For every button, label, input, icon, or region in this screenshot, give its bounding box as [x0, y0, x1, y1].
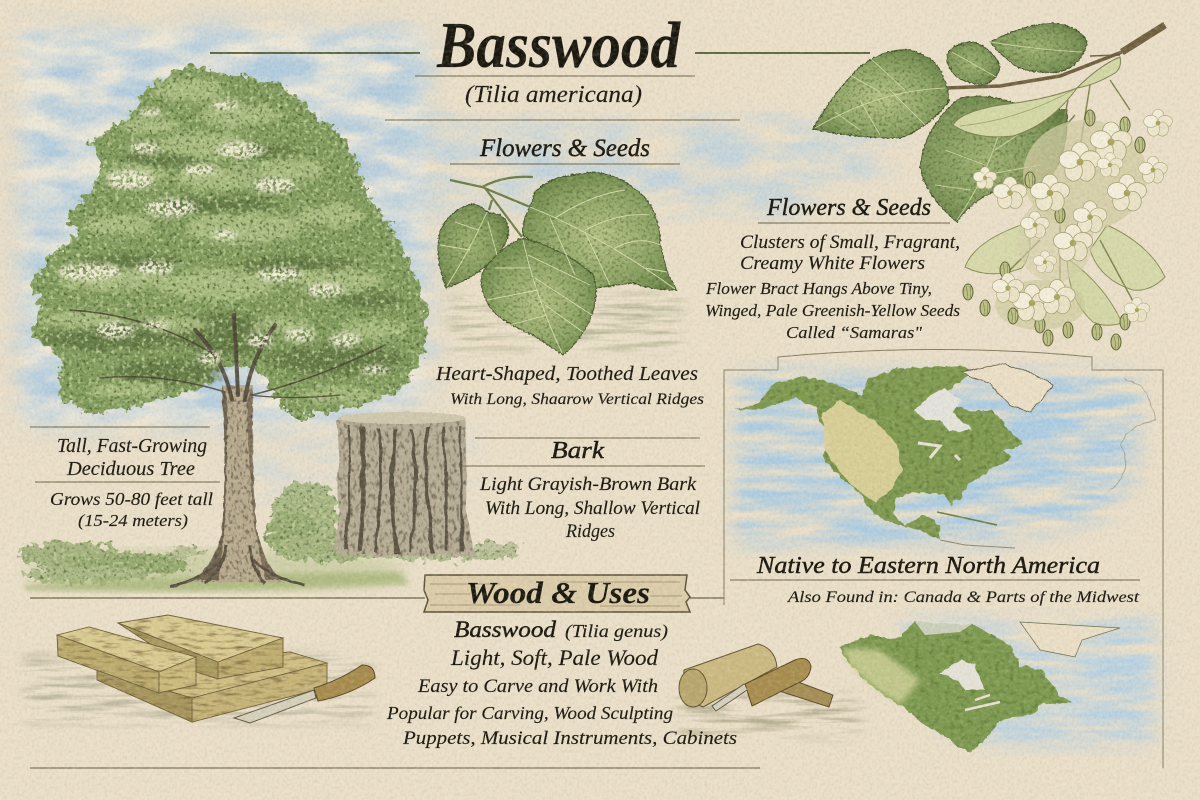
- sky base wash: [22, 30, 425, 425]
- text block: right flowers & seeds: Creamy White Flowers: [740, 253, 925, 274]
- sky wash: upper centre: [400, 120, 900, 215]
- map: North America: [733, 364, 1155, 548]
- lower bracts: [965, 223, 1030, 274]
- ground wash: centre leaves: [450, 295, 680, 350]
- text block: tree facts: (15-24 meters): [78, 511, 188, 530]
- canopy dark undersides: [40, 144, 405, 384]
- title rule right: [695, 52, 870, 54]
- icon: heart-shaped leaves: [438, 172, 677, 355]
- map: lower reflection: [840, 620, 1155, 753]
- text block: wood uses: (Tilia genus): [565, 621, 668, 642]
- banner: wood & uses: Wood & Uses: [466, 575, 650, 610]
- text block: leaves: Heart-Shaped, Toothed Leaves: [435, 363, 698, 385]
- map tan interior: [822, 400, 902, 502]
- boards: [57, 615, 327, 722]
- text block: wood uses: Easy to Carve and Work With: [417, 676, 658, 697]
- panel: map frame: [724, 350, 1163, 768]
- sky wash: behind stump: [230, 425, 470, 500]
- map ocean: [735, 372, 1140, 545]
- text block: right flowers & seeds: [705, 195, 960, 342]
- Caribbean islands: [937, 512, 997, 525]
- illustration: mallet and gouge: [679, 644, 833, 711]
- bract short: [1077, 57, 1120, 88]
- Hudson Bay: [915, 388, 972, 432]
- map land green: [733, 366, 1023, 540]
- flower cluster: [963, 109, 1172, 350]
- bottom rule: [30, 767, 760, 769]
- flower stalks: [1000, 80, 1135, 305]
- text block: wood uses: Light, Soft, Pale Wood: [450, 645, 659, 670]
- text block: right flowers & seeds: Called “Samaras": [786, 323, 923, 342]
- canopy light leaf masses: [40, 78, 410, 402]
- title rule left: [210, 52, 420, 54]
- ground wash: lower centre: [680, 695, 860, 735]
- text block: wood uses: Popular for Carving, Wood Sculpting: [386, 703, 673, 723]
- text block: right flowers & seeds: Flower Bract Hangs Above Tiny,: [705, 279, 932, 298]
- text block: leaves: [435, 363, 704, 408]
- text block: bark: Ridges: [565, 521, 615, 542]
- bark stump illustration: [332, 412, 478, 556]
- Greenland: [962, 364, 1053, 412]
- subtitle: (Tilia americana): [465, 82, 642, 108]
- text block: wood uses: [386, 617, 737, 749]
- bract long: [953, 88, 1077, 137]
- leaves: [813, 23, 1087, 222]
- text block: bark: Light Grayish-Brown Bark: [479, 474, 697, 495]
- tree illustration: [30, 66, 427, 587]
- illustration: stacked boards and chisel: [57, 615, 375, 723]
- text block: bark: Bark: [551, 438, 604, 464]
- grass strip: [25, 572, 410, 591]
- chisel: [234, 690, 316, 723]
- rule left of wood banner: [30, 597, 724, 599]
- text block: range: [730, 553, 1140, 606]
- text block: range: Also Found in: Canada & Parts of the Midwest: [787, 589, 1140, 606]
- text block: leaves: With Long, Shaarow Vertical Ridges: [450, 391, 704, 408]
- text block: wood uses: Basswood: [454, 617, 557, 642]
- Central America coast: [940, 540, 1015, 548]
- text block: right flowers & seeds: Winged, Pale Greenish-Yellow Seeds: [705, 301, 960, 320]
- shrubs right: [266, 481, 523, 562]
- text block: bark: [460, 438, 705, 542]
- title: Basswood: [436, 9, 681, 82]
- text block: range: Native to Eastern North America: [756, 553, 1100, 579]
- canopy silhouette: [30, 66, 427, 419]
- ground and shrubs under tree: [20, 481, 523, 591]
- sky wash: upper left: [18, 28, 430, 425]
- text block: tree facts: Deciduous Tree: [66, 458, 195, 480]
- illustration: flowering branch: [813, 23, 1172, 350]
- text block: right flowers & seeds: Flowers & Seeds: [766, 195, 931, 221]
- text block: tree facts: Tall, Fast-Growing: [57, 435, 207, 457]
- branches: [70, 310, 385, 400]
- text block: right flowers & seeds: Clusters of Small, Fragrant,: [740, 232, 960, 253]
- text block: wood uses: Puppets, Musical Instruments, Cabinets: [402, 728, 737, 749]
- text block: bark: With Long, Shallow Vertical: [485, 498, 700, 519]
- distant coastline: [1110, 378, 1155, 490]
- text block: tree facts: [30, 427, 220, 530]
- panel: centre flowers & seeds heading: Flowers & Seeds: [479, 135, 650, 162]
- ground wash: lower left: [25, 655, 370, 722]
- banner: wood & uses: [424, 575, 690, 612]
- Great Lakes: [918, 443, 960, 460]
- text block: tree facts: Grows 50-80 feet tall: [50, 489, 213, 509]
- shrubs left: [20, 542, 205, 584]
- canopy foliage: [30, 66, 427, 419]
- leaf veins: [815, 42, 1082, 220]
- branch: [1122, 25, 1165, 52]
- canopy white blossoms: [58, 100, 389, 375]
- trunk: [170, 385, 305, 587]
